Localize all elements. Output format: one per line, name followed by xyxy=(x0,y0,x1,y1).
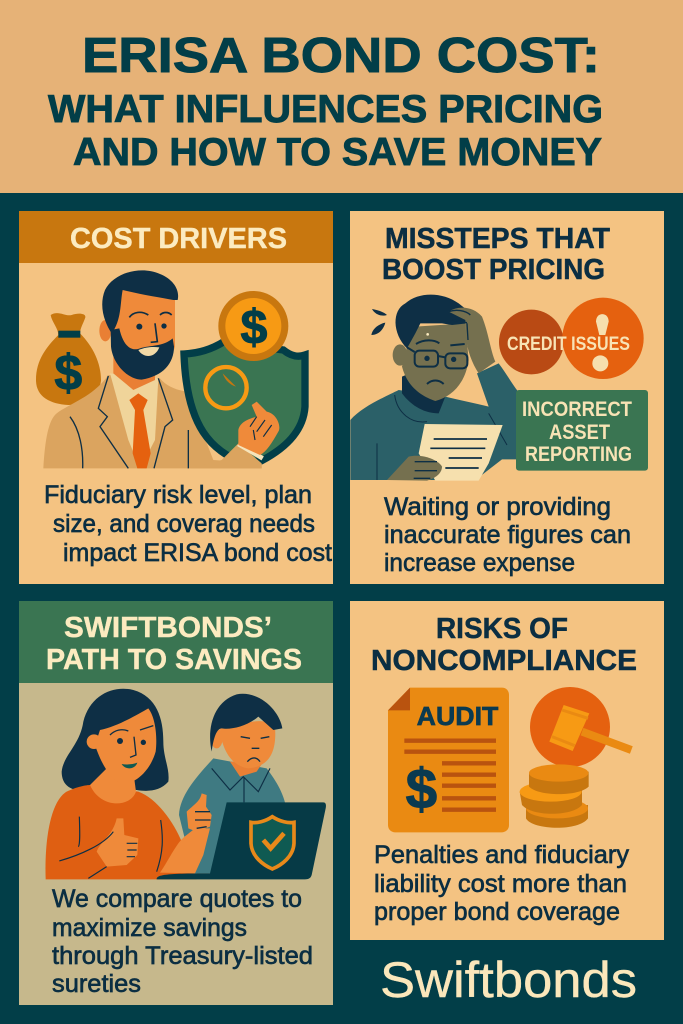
heading: risks of noncompliance xyxy=(371,613,637,677)
heading: swiftbonds' path to savings: PATH TO SAVINGS xyxy=(46,644,302,676)
illustration: worried man reading paper xyxy=(350,295,648,481)
text: missteps description: increase expense xyxy=(384,549,575,577)
title banner: AND HOW TO SAVE MONEY xyxy=(73,131,602,174)
badge text: incorrect asset reporting: INCORRECT xyxy=(522,398,632,421)
text: missteps description: inaccurate figures can xyxy=(384,521,631,549)
illustration: audit document, gavel and coins xyxy=(388,687,631,832)
badge text: incorrect asset reporting: REPORTING xyxy=(525,443,632,466)
text: savings description: through Treasury-listed xyxy=(52,942,313,970)
text: savings description xyxy=(52,885,313,998)
heading: risks of noncompliance: NONCOMPLIANCE xyxy=(371,645,637,677)
text: savings description: sureties xyxy=(52,970,141,998)
heading: missteps that boost pricing: MISSTEPS THAT xyxy=(385,223,610,255)
logo: Swiftbonds wordmark: Swiftbonds xyxy=(380,952,637,1008)
title banner: WHAT INFLUENCES PRICING xyxy=(48,88,603,131)
panel: risks of noncompliance xyxy=(350,601,664,940)
illustration: audit document, gavel and coins: $ xyxy=(406,758,437,821)
text: risks description: liability cost more than xyxy=(374,870,627,898)
text: risks description xyxy=(374,841,629,926)
heading: swiftbonds' path to savings: SWIFTBONDS’ xyxy=(64,612,272,644)
illustration: audit document, gavel and coins: AUDIT xyxy=(417,703,499,731)
text: missteps description xyxy=(384,493,631,577)
heading: risks of noncompliance: RISKS OF xyxy=(436,613,568,645)
illustration: man with money bag and shield xyxy=(36,270,305,468)
text: cost drivers description: impact ERISA bond cost xyxy=(63,539,332,567)
heading: cost drivers: COST DRIVERS xyxy=(70,223,287,255)
panel: missteps xyxy=(350,211,664,584)
panel: swiftbonds path to savings xyxy=(19,601,333,1005)
badge text: credit issues: CREDIT ISSUES xyxy=(507,334,630,355)
illustration: man with money bag and shield: $ xyxy=(54,345,82,401)
text: risks description: proper bond coverage xyxy=(374,898,620,926)
text: cost drivers description: Fiduciary risk level, plan xyxy=(44,481,312,509)
text: savings description: maximize savings xyxy=(52,914,247,942)
heading: missteps that boost pricing: BOOST PRICING xyxy=(382,254,605,286)
badge text: incorrect asset reporting xyxy=(522,398,632,466)
illustration: man with money bag and shield: $ xyxy=(241,300,268,354)
text: missteps description: Waiting or providing xyxy=(384,493,611,521)
panel: cost drivers xyxy=(19,211,333,584)
badge text: incorrect asset reporting: ASSET xyxy=(549,421,610,444)
text: risks description: Penalties and fiduciary xyxy=(374,841,629,869)
heading: swiftbonds' path to savings xyxy=(46,612,302,676)
text: cost drivers description: size, and coverag needs xyxy=(53,510,315,538)
text: savings description: We compare quotes to xyxy=(52,885,302,913)
title banner xyxy=(0,0,683,193)
text: cost drivers description xyxy=(44,481,332,567)
heading: missteps that boost pricing xyxy=(382,223,610,286)
illustration: two people at laptop xyxy=(45,689,326,879)
title banner: ERISA BOND COST: xyxy=(82,29,600,83)
